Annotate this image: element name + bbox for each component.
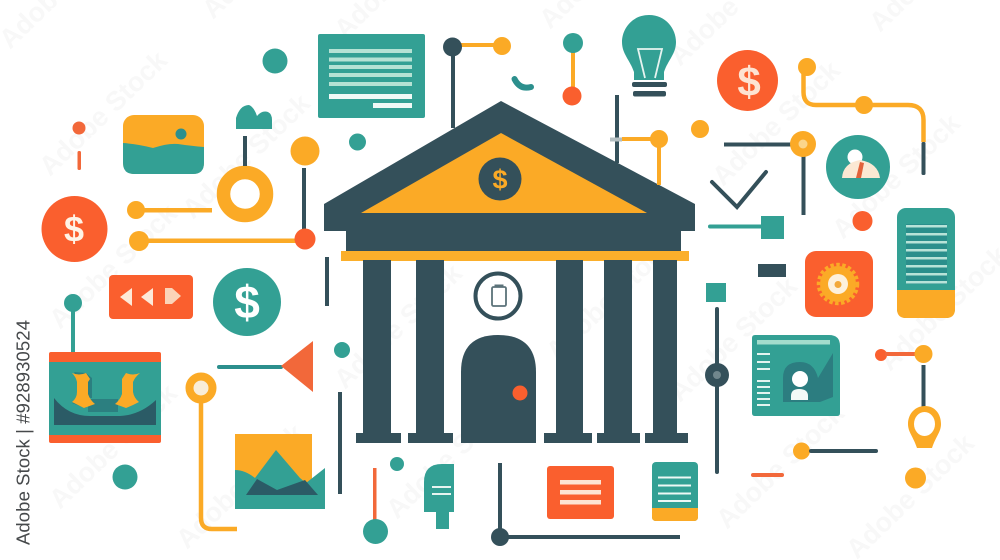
red dot bbox=[852, 211, 872, 231]
right roof connector bbox=[610, 95, 668, 185]
short vertical bars bbox=[325, 257, 342, 494]
teal dot bbox=[112, 464, 138, 490]
mountain picture bbox=[235, 434, 325, 509]
landscape card bbox=[123, 115, 204, 174]
teal dollar coin bbox=[213, 268, 281, 336]
left cluster icons bbox=[42, 34, 425, 529]
yellow node connector bbox=[290, 136, 320, 230]
teal bookmark bbox=[236, 105, 272, 166]
node line bbox=[793, 442, 878, 460]
small dark bar bbox=[758, 264, 786, 277]
top connectors and bulb bbox=[443, 15, 676, 185]
bottom cluster icons bbox=[363, 462, 698, 546]
pediment dollar badge bbox=[478, 158, 522, 200]
right cluster icons bbox=[691, 50, 955, 488]
watermarks: Adobe Stock bbox=[540, 229, 681, 366]
pointer triangle bbox=[217, 341, 313, 392]
watermarks: Adobe Stock bbox=[43, 377, 184, 514]
square connector bbox=[708, 216, 784, 239]
yellow dot bbox=[691, 120, 709, 138]
phone document bbox=[897, 208, 955, 318]
stock id text: Adobe Stock | #928930524 bbox=[12, 320, 34, 545]
light bulb bbox=[622, 15, 676, 96]
watermarks: Adobe Stock bbox=[33, 44, 174, 181]
small red node and dash bbox=[72, 122, 86, 170]
pediment dollar badge: $ bbox=[492, 164, 508, 194]
pin connector bbox=[875, 345, 941, 448]
bank building bbox=[324, 101, 695, 443]
yellow dot bbox=[905, 468, 926, 488]
orange dollar badge: $ bbox=[737, 58, 761, 105]
pediment bbox=[361, 133, 647, 213]
watermarks: Adobe Stock bbox=[170, 417, 311, 554]
columns bbox=[356, 260, 688, 443]
small arc bbox=[514, 79, 531, 88]
orange list card bbox=[547, 466, 614, 519]
roof bbox=[324, 101, 695, 252]
media control card bbox=[109, 275, 193, 319]
watermarks: Adobe Stock bbox=[380, 387, 521, 524]
door bbox=[461, 335, 536, 443]
scattered teal dots bbox=[262, 48, 404, 471]
profile screen bbox=[752, 335, 840, 416]
user badge bbox=[826, 135, 890, 199]
red dash bbox=[751, 473, 784, 477]
ring connector bbox=[724, 131, 816, 215]
watermarks: Adobe Stock bbox=[176, 87, 317, 224]
emblem bbox=[476, 274, 520, 318]
watermarks: Adobe Stock bbox=[328, 257, 469, 394]
connector lines bbox=[127, 201, 316, 251]
cornice stripe bbox=[341, 251, 689, 261]
orange dollar coin: $ bbox=[64, 208, 84, 250]
bottom L connector bbox=[491, 463, 680, 546]
orange dollar badge bbox=[717, 50, 778, 111]
loop connector bbox=[190, 376, 237, 529]
teal note card bbox=[652, 462, 698, 521]
orange dollar coin bbox=[42, 196, 108, 262]
teal-red connector bbox=[562, 33, 583, 106]
ring bbox=[224, 172, 266, 216]
yellow circuit bbox=[798, 58, 926, 175]
vertical slider bbox=[705, 283, 729, 474]
watermarks: Adobe Stock bbox=[706, 54, 847, 191]
sun app icon bbox=[805, 251, 873, 317]
check mark bbox=[712, 172, 766, 207]
teal dollar coin: $ bbox=[234, 276, 260, 328]
watermarks: Adobe Stock bbox=[826, 107, 967, 244]
watermarks: Adobe Stock bbox=[710, 397, 851, 534]
vertical node bbox=[363, 468, 388, 544]
top connector bbox=[443, 37, 511, 128]
document card bbox=[318, 34, 425, 118]
watermarks: Adobe Stock bbox=[663, 270, 804, 407]
watermarks: Adobe Stock bbox=[43, 197, 184, 334]
mailbox icon bbox=[424, 464, 454, 529]
monitor icon bbox=[49, 294, 161, 443]
